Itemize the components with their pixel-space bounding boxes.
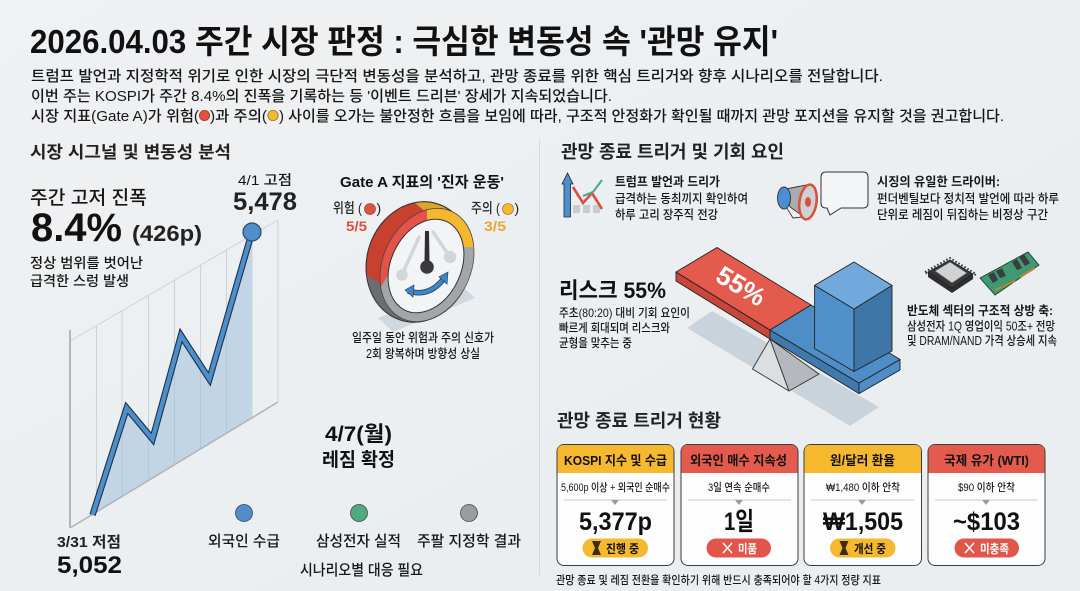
card: won dollar rate [804, 444, 922, 566]
card: KOSPI [557, 444, 674, 566]
callout: weekly range: 급격한 스렁 발생 [30, 273, 129, 289]
text: sole market driver: 펀더벤틸보다 정치적 발언에 따라 하루 [877, 192, 1059, 206]
card: foreign buying: 미품 [738, 542, 757, 556]
card: WTI oil: 미충족 [980, 542, 1009, 556]
card: WTI oil [928, 444, 1045, 566]
scenario legend [208, 504, 521, 579]
text: semiconductor support [907, 304, 1057, 348]
card: WTI oil: 국제 유가 (WTI) [944, 453, 1029, 468]
intro text block: )과 주의( [210, 108, 267, 125]
panel: Gate A pendulum: Gate A 지표의 '진자 운동' [340, 174, 504, 191]
intro text block: 트럼프 발언과 지정학적 위기로 인한 시장의 극단적 변동성을 분석하고, 관망 종료를 위한 핵심 트리거와 향후 시나리오를 전달합니다. [31, 68, 883, 85]
card: won dollar rate: ₩1,505 [823, 508, 903, 536]
card: won dollar rate: ₩1,480 이하 안착 [826, 481, 900, 494]
callout: weekly range: (426p) [132, 221, 202, 246]
text: semiconductor support: 삼성전자 1Q 영업이익 50조+ 전망 [907, 320, 1055, 334]
text: Trump remarks: 하루 고리 장주직 전강 [615, 208, 718, 222]
card: foreign buying: 1일 [724, 508, 754, 536]
panel: Gate A pendulum: 일주일 동안 위험과 주의 신호가 [352, 330, 494, 345]
card: won dollar rate: 개선 중 [854, 542, 886, 556]
intro text block [31, 68, 1004, 125]
scenario legend: 주팔 지정학 결과 [417, 533, 521, 550]
text: risk 55%: 리스크 55% [559, 278, 666, 303]
text: risk 55%: 빠르게 회대되며 리스크와 [559, 321, 670, 335]
card: foreign buying: 외국인 매수 지속성 [690, 453, 787, 468]
panel: Gate A pendulum: 2회 왕복하며 방향성 상실 [366, 347, 480, 361]
label: low point: 3/31 저점 [57, 534, 121, 551]
scenario legend: 삼성전자 실적 [316, 533, 401, 550]
icon: megaphone and speech bubble [778, 172, 868, 221]
label: high point: 5,478 [233, 188, 297, 216]
label: low point: 5,052 [57, 552, 122, 579]
text: sole market driver: 시징의 유일한 드라이버: [877, 174, 1000, 189]
text: sole market driver [877, 174, 1059, 222]
text: risk 55%: 주초(80:20) 대비 기회 요인이 [559, 306, 690, 320]
panel: Gate A pendulum [333, 174, 519, 361]
text: risk 55%: 균형을 맞추는 중 [559, 335, 632, 350]
scenario legend: 외국인 수급 [208, 533, 280, 550]
text: risk 55% [559, 278, 690, 350]
callout: weekly range: 주간 고저 진폭 [30, 187, 147, 209]
intro text block: 시장 지표(Gate A)가 위험( [31, 108, 199, 125]
card: KOSPI: KOSPI 지수 및 수급 [564, 453, 667, 468]
line chart: weekly KOSPI move [70, 220, 278, 528]
card: KOSPI: 5,377p [579, 508, 652, 536]
card: WTI oil: ~$103 [953, 508, 1020, 536]
panel: Gate A pendulum: 5/5 [346, 218, 367, 234]
icon: gauge dial [366, 201, 475, 332]
icon: seesaw risk balance [676, 248, 900, 426]
panel: Gate A pendulum: ) [514, 200, 519, 216]
heading: triggers and opportunities: 관망 종료 트리거 및 기회 요인 [561, 142, 784, 162]
title: 2026.04.03 주간 시장 판정 : 극심한 변동성 속 '관망 유지' [30, 23, 778, 60]
footnote: 관망 종료 및 레짐 전환을 확인하기 위해 반드시 충족되어야 할 4가지 정량 지표 [556, 573, 881, 587]
card: foreign buying [681, 444, 798, 566]
callout: regime confirmation date: 레짐 확정 [322, 449, 395, 471]
panel: Gate A pendulum: 3/5 [484, 218, 506, 234]
text: Trump remarks [615, 174, 748, 222]
panel: Gate A pendulum: 위험 ( [333, 200, 362, 216]
scenario legend: 시나리오별 대응 필요 [300, 562, 423, 579]
card: foreign buying: 3일 연속 순매수 [708, 480, 770, 494]
text: semiconductor support: 반도체 섹터의 구조적 상방 축: [907, 304, 1053, 318]
panel: Gate A pendulum: 주의 ( [471, 200, 500, 216]
label: high point [233, 172, 297, 216]
icon: memory module [980, 252, 1039, 295]
icon: rising chart [562, 173, 602, 217]
callout: weekly range: 8.4% [31, 206, 122, 250]
panel: Gate A pendulum: ) [376, 200, 381, 216]
label: low point [57, 534, 122, 579]
text: sole market driver: 단위로 레짐이 뒤집하는 비정상 구간 [877, 208, 1048, 222]
heading: trigger status: 관망 종료 트리거 현황 [557, 411, 721, 431]
intro text block: ) 사이를 오가는 불안정한 흐름을 보임에 따라, 구조적 안정화가 확인될 때까지 관망 포지션을 유지할 것을 권고합니다. [279, 108, 1004, 125]
card: WTI oil: $90 이하 안착 [958, 481, 1015, 494]
callout: regime confirmation date: 4/7(월) [325, 423, 392, 446]
callout: weekly range [30, 187, 202, 289]
callout: weekly range: 정상 범위를 벗어난 [30, 255, 143, 271]
card: KOSPI: 5,600p 이상 + 외국인 순매수 [561, 481, 670, 494]
icon: semiconductor chip [925, 258, 976, 293]
callout: regime confirmation date [322, 423, 395, 471]
card: KOSPI: 진행 중 [606, 541, 639, 556]
intro text block: 이번 주는 KOSPI가 주간 8.4%의 진폭을 기록하는 등 '이벤트 드리븐' 장세가 지속되었습니다. [31, 88, 612, 105]
heading: market signals: 시장 시그널 및 변동성 분석 [30, 143, 231, 162]
icon: seesaw risk balance: 55% [711, 260, 771, 312]
label: high point: 4/1 고점 [238, 172, 292, 188]
text: Trump remarks: 트럼프 발언과 드리가 [615, 174, 720, 189]
text: Trump remarks: 급격하는 동최끼지 확인하여 [615, 192, 748, 206]
card: won dollar rate: 원/달러 환율 [830, 453, 895, 468]
